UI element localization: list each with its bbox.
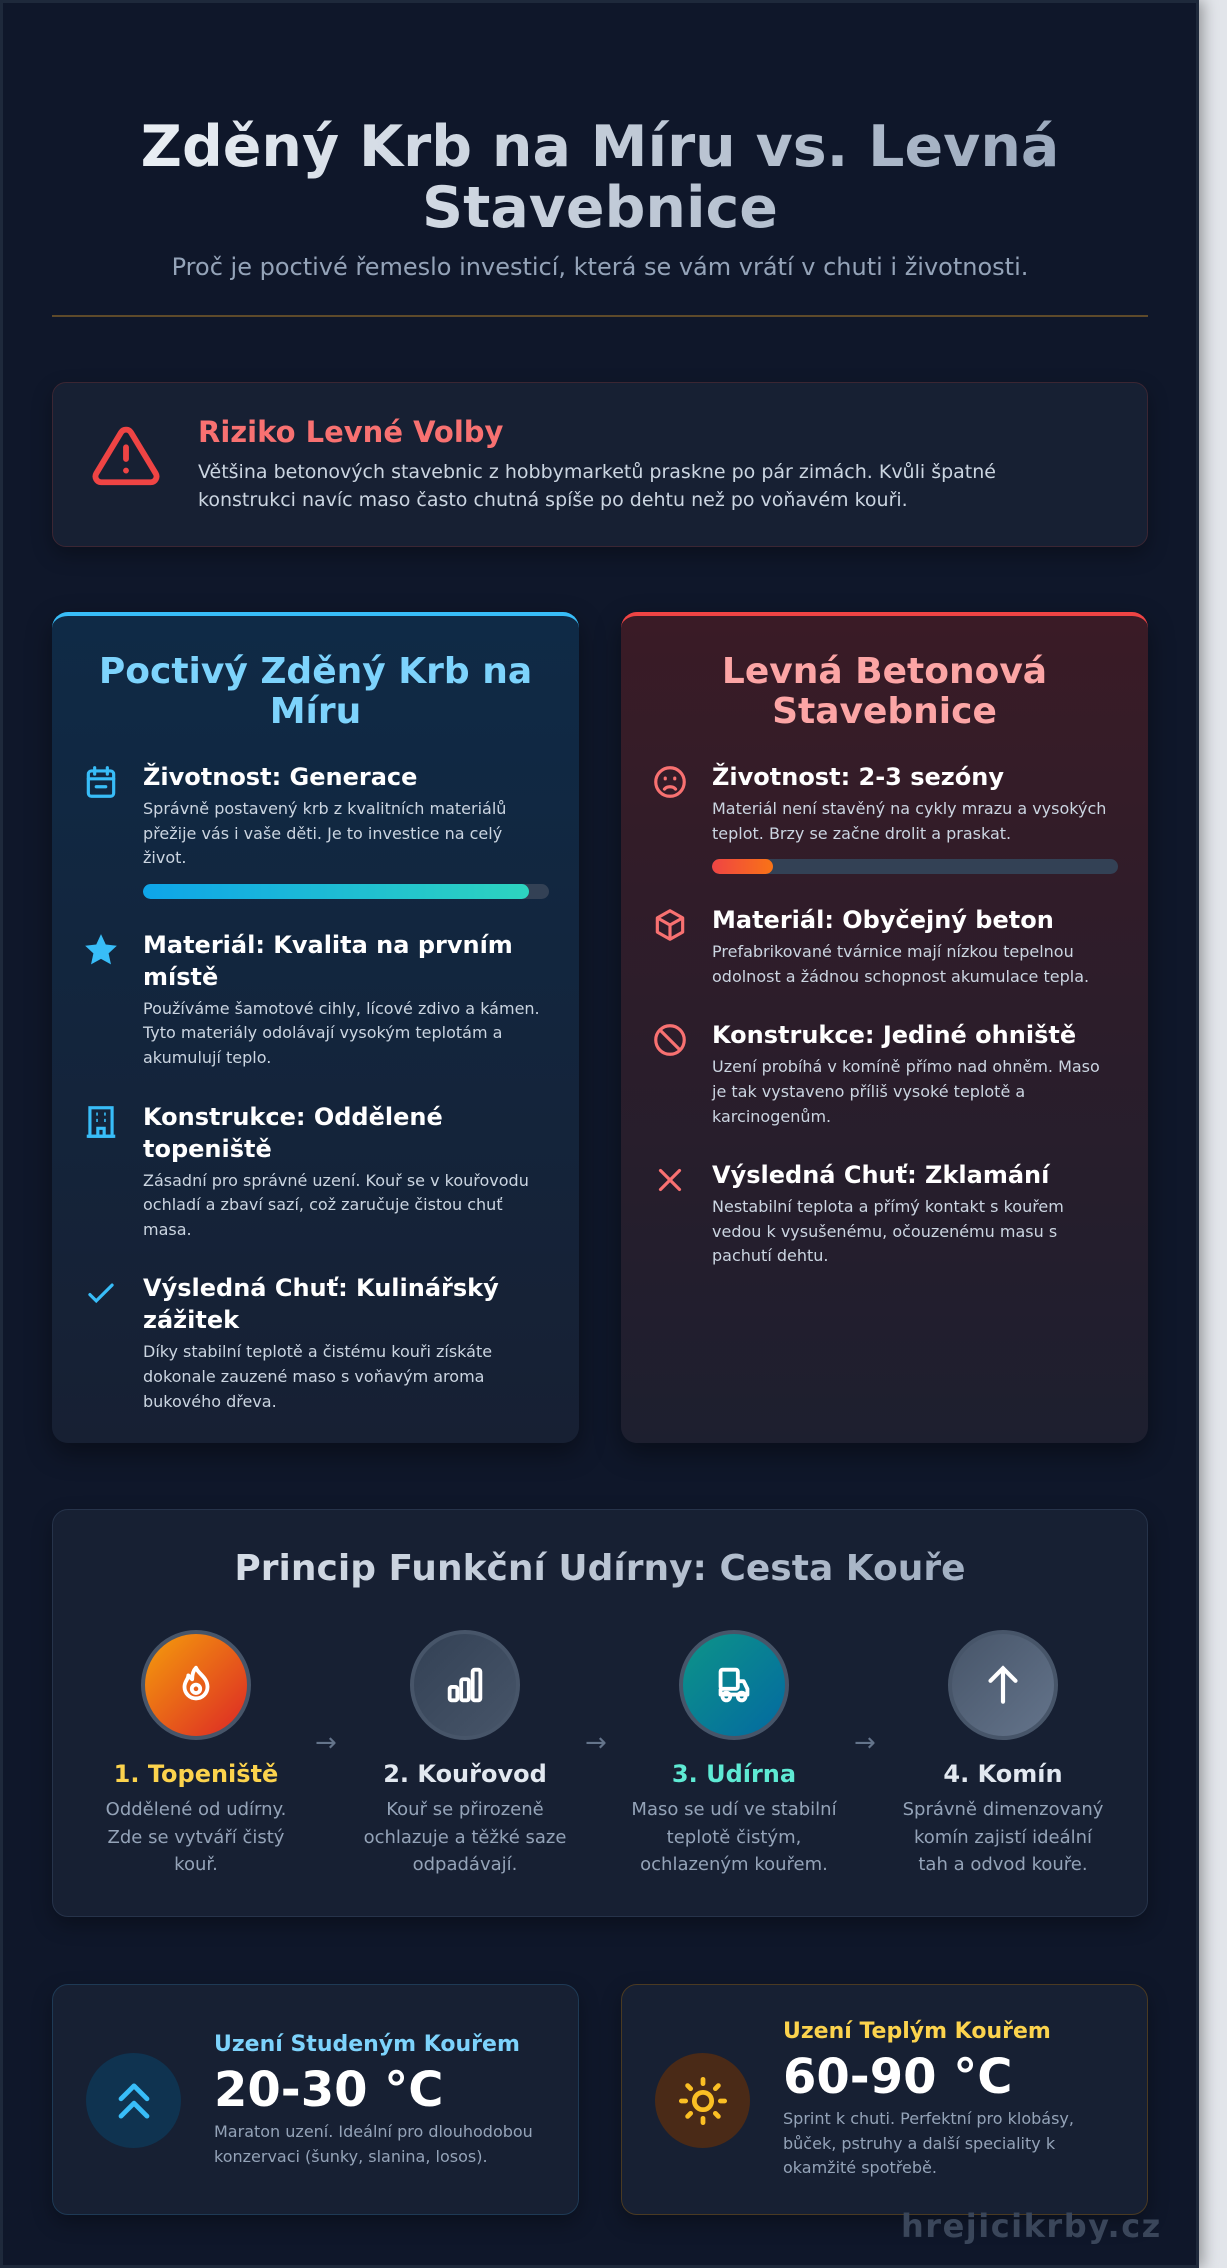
text: warm smoke: Sprint k chuti. Perfektní pro klobásy, bůček, pstruhy a další speciality k okamžité spotřebě. bbox=[783, 2109, 1074, 2177]
step 2: flue: Kouř se přirozeně ochlazuje a těžké saze odpadávají. bbox=[364, 1799, 566, 1875]
step 3: smokehouse: Maso se udí ve stabilní teplotě čistým, ochlazeným kouřem. bbox=[631, 1799, 837, 1875]
panel: smoke path process bbox=[52, 1509, 1148, 1917]
title: Zděný Krb na Míru vs. Levná Stavebnice bbox=[141, 114, 1059, 241]
subtitle: Proč je poctivé řemeslo investicí, která se vám vrátí v chuti i životnosti. bbox=[172, 253, 1028, 281]
stat: 60-90 °C: 60-90 °C bbox=[783, 2049, 1012, 2105]
item: material: Používáme šamotové cihly, lícové zdivo a kámen. Tyto materiály odolávají vysokým teplotám a akumulují teplo. bbox=[143, 999, 540, 1067]
panel: cold smoking bbox=[52, 1984, 579, 2215]
item: construction: Uzení probíhá v komíně přímo nad ohněm. Maso je tak vystaveno příliš vysoké teplotě a karcinogenům. bbox=[712, 1057, 1100, 1126]
item: material: Materiál: Kvalita na prvním místě bbox=[143, 931, 513, 991]
item: construction: Konstrukce: Jediné ohniště bbox=[712, 1021, 1076, 1049]
item: material bbox=[85, 931, 540, 1067]
heading: cold smoke: Uzení Studeným Kouřem bbox=[214, 2032, 520, 2057]
arrow 3: → bbox=[854, 1728, 876, 1758]
item: lifetime bbox=[86, 762, 549, 899]
heading: process bbox=[53, 1548, 1147, 1589]
step 1: firebox: Oddělené od udírny. Zde se vytváří čistý kouř. bbox=[106, 1799, 286, 1875]
step 4: chimney bbox=[903, 1630, 1103, 1875]
step 3: smokehouse: 3. Udírna bbox=[672, 1760, 796, 1788]
item: taste: Nestabilní teplota a přímý kontakt s kouřem vedou k vysušenému, očouzenému masu s pachutí dehtu. bbox=[712, 1197, 1064, 1265]
item: construction bbox=[654, 1021, 1100, 1126]
arrow 2: → bbox=[585, 1728, 607, 1758]
text: cold smoke: Maraton uzení. Ideální pro dlouhodobou konzervaci (šunky, slanina, losos). bbox=[214, 2122, 533, 2166]
item: construction: Konstrukce: Oddělené topeniště bbox=[143, 1103, 443, 1163]
heading: risk: Riziko Levné Volby bbox=[198, 415, 503, 449]
item: material bbox=[656, 906, 1089, 986]
item: lifetime: Materiál není stavěný na cykly mrazu a vysokých teplot. Brzy se začne drolit a praskat. bbox=[712, 799, 1106, 843]
arrow 1: → bbox=[315, 1728, 337, 1758]
step 4: chimney: Správně dimenzovaný komín zajistí ideální tah a odvod kouře. bbox=[903, 1799, 1103, 1875]
icon: warning triangle bbox=[92, 426, 160, 486]
item: construction bbox=[86, 1103, 529, 1239]
item: taste bbox=[88, 1274, 499, 1411]
item: construction: Zásadní pro správné uzení. Kouř se v kouřovodu ochladí a zbaví sazí, což zaručuje čistou chuť masa. bbox=[143, 1171, 529, 1239]
step 3: smokehouse bbox=[631, 1630, 837, 1875]
step 4: chimney: 4. Komín bbox=[943, 1760, 1063, 1788]
step 1: firebox: 1. Topeniště bbox=[114, 1760, 278, 1788]
heading: process: Princip Funkční Udírny: Cesta Kouře bbox=[234, 1548, 966, 1589]
panel: cheap concrete kit bbox=[621, 612, 1148, 1443]
panel: honest brick fireplace bbox=[52, 612, 579, 1443]
panel: risk warning bbox=[52, 382, 1148, 547]
item: material: Prefabrikované tvárnice mají nízkou tepelnou odolnost a žádnou schopnost akumulace tepla. bbox=[712, 942, 1089, 986]
heading: warm smoke: Uzení Teplým Kouřem bbox=[783, 2019, 1051, 2044]
item: taste: Díky stabilní teplotě a čistému kouři získáte dokonale zauzené maso s voňavým aroma bukového dřeva. bbox=[143, 1342, 492, 1411]
step 1: firebox bbox=[106, 1630, 286, 1875]
item: lifetime: Životnost: Generace bbox=[143, 763, 417, 791]
step 2: flue bbox=[364, 1630, 566, 1875]
text: risk: Většina betonových stavebnic z hobbymarketů praskne po pár zimách. Kvůli špatné konstrukci navíc maso často chutná spíše po dehtu než po voňavém kouři. bbox=[198, 461, 996, 510]
item: lifetime: Správně postavený krb z kvalitních materiálů přežije vás i vaše děti. Je to investice na celý život. bbox=[143, 799, 506, 867]
heading: right card: Levná Betonová Stavebnice bbox=[722, 651, 1047, 732]
heading: left card: Poctivý Zděný Krb na Míru bbox=[99, 651, 532, 732]
progress bar: 95% bbox=[143, 884, 549, 899]
step 2: flue: 2. Kouřovod bbox=[383, 1760, 547, 1788]
watermark: hrejicikrby.cz bbox=[901, 2207, 1162, 2245]
item: lifetime: Životnost: 2-3 sezóny bbox=[712, 763, 1004, 791]
item: taste bbox=[658, 1161, 1064, 1265]
item: lifetime bbox=[654, 762, 1118, 874]
progress bar: 15% bbox=[712, 859, 1118, 874]
item: taste: Výsledná Chuť: Kulinářský zážitek bbox=[143, 1274, 499, 1334]
stat: 20-30 °C: 20-30 °C bbox=[214, 2062, 443, 2118]
icon: chevrons up bbox=[86, 2053, 181, 2148]
item: taste: Výsledná Chuť: Zklamání bbox=[712, 1161, 1049, 1189]
panel: warm smoking bbox=[621, 1984, 1148, 2215]
item: material: Materiál: Obyčejný beton bbox=[712, 906, 1054, 934]
icon: sun bbox=[655, 2053, 750, 2148]
